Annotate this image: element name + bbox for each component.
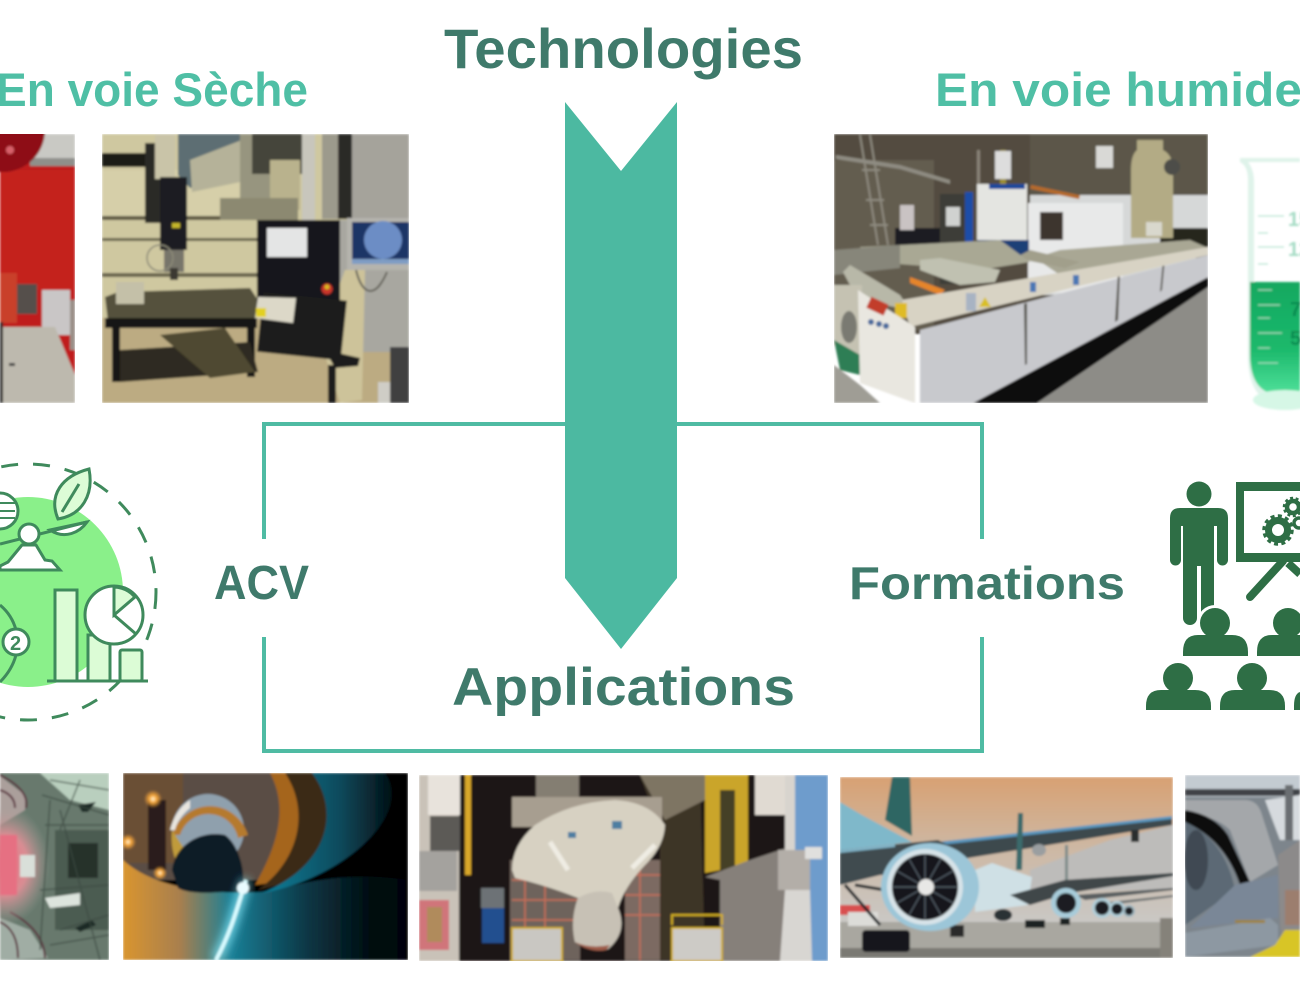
photo: red welding robot cell <box>0 134 75 403</box>
photo: car body <box>1184 775 1300 957</box>
icon: trainer and audience <box>1146 482 1300 710</box>
photo: aircraft row <box>840 777 1173 958</box>
arrow: technologies to applications <box>565 102 677 649</box>
icon: life cycle analysis <box>0 464 156 720</box>
icon: life cycle analysis: 2 <box>10 633 21 655</box>
heading: Applications: Applications <box>452 658 795 717</box>
photo: welder in pipe <box>120 773 408 960</box>
photo: laser machine with control panel <box>102 134 409 403</box>
photo: surface treatment line <box>834 134 1208 403</box>
label: ACV: ACV <box>214 557 309 610</box>
label: Formations: Formations <box>849 557 1125 609</box>
heading: Technologies: Technologies <box>444 17 803 80</box>
photo: green liquid beaker <box>1240 158 1300 410</box>
photo: ship in shipyard <box>419 775 828 961</box>
frame: connecting outline <box>264 424 982 751</box>
heading: En voie Sèche: En voie Sèche <box>0 63 308 116</box>
heading: En voie humide: En voie humide <box>935 63 1300 116</box>
photo: tokamak interior <box>0 773 109 960</box>
